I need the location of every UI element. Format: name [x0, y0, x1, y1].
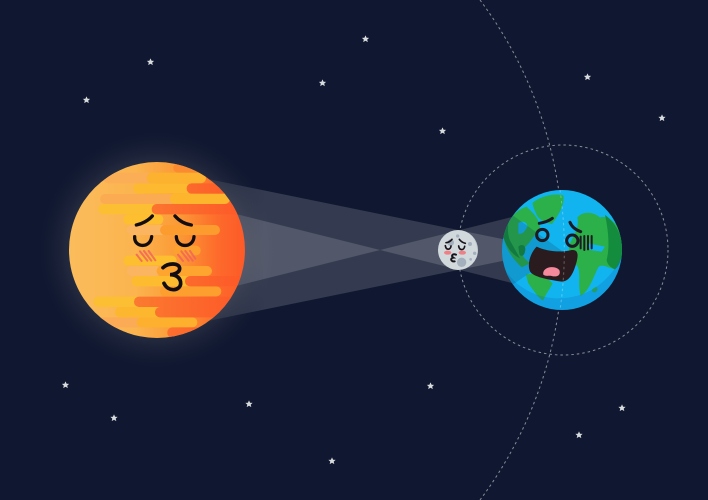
sun blush [137, 251, 195, 261]
sun face [135, 216, 194, 290]
stars [62, 35, 666, 464]
moon craters [447, 234, 476, 267]
sun stripes [93, 164, 241, 337]
moon blush [444, 251, 466, 255]
blue detail patches [518, 222, 605, 252]
earth face [537, 218, 592, 250]
shadow cones [203, 178, 556, 322]
sun glow [35, 128, 279, 372]
darker land shading [502, 215, 623, 269]
earth tongue [543, 267, 560, 276]
lower shade [506, 258, 622, 310]
earth [502, 190, 622, 310]
earth mouth [529, 247, 578, 282]
dashed orbit overlay on earth [560, 190, 564, 310]
moon [438, 230, 480, 270]
beam shadow on earth [502, 216, 562, 284]
continents [503, 194, 622, 301]
moon face [445, 239, 465, 261]
sun [69, 162, 245, 338]
orbit paths [458, 0, 668, 500]
